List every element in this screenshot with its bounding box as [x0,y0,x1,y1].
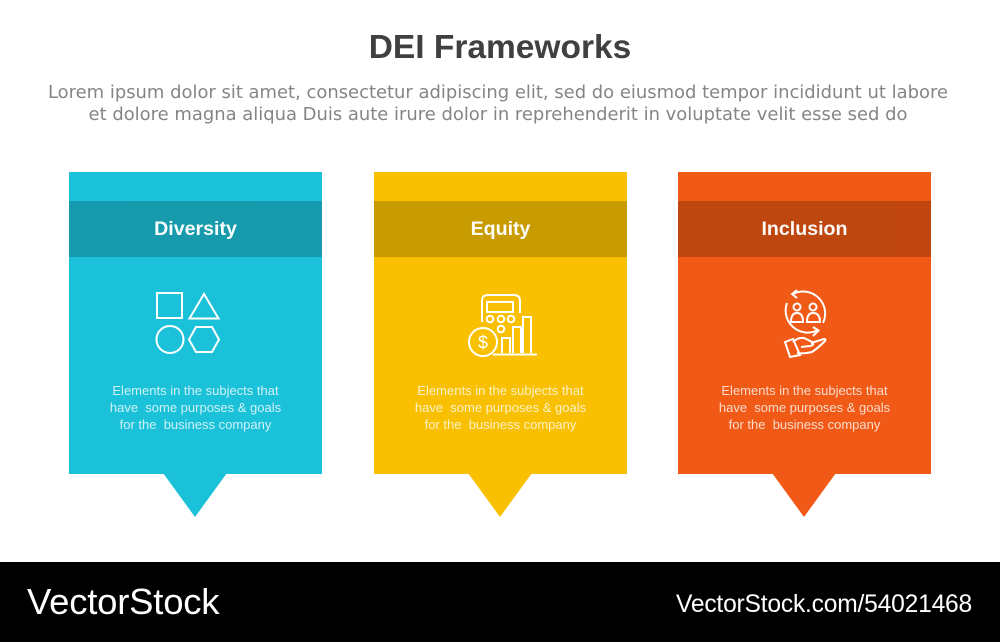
image url text: VectorStock.com/54021468 [676,591,972,618]
panel: diversity [69,172,322,517]
description: equity: have some purposes & goals [415,400,586,414]
description: inclusion: for the business company [729,416,880,432]
icon: calculator and coins: $ [478,332,488,352]
icon: calculator and coins [468,294,537,357]
description: inclusion [719,382,890,432]
heading: inclusion [678,201,931,257]
panel: inclusion [678,172,931,517]
heading: equity: Equity [471,218,530,240]
description: diversity: have some purposes & goals [110,400,281,414]
footer bar [0,562,1000,642]
description: equity [415,382,586,432]
pointer: inclusion [772,473,836,517]
panel: equity [374,172,627,517]
heading: diversity [69,201,322,257]
description: diversity: for the business company [120,416,271,432]
heading: diversity: Diversity [154,218,237,240]
pointer: diversity [163,473,227,517]
pointer: equity [468,473,532,517]
title: DEI Frameworks [369,29,631,66]
subtitle text: Lorem ipsum dolor sit amet, consectetur adipiscing elit, sed do eiusmod tempor incididunt ut labore [48,82,948,102]
description: equity: Elements in the subjects that [417,382,584,398]
description: inclusion: have some purposes & goals [719,400,890,414]
brand logo text: VectorStock [27,581,219,622]
icon: shapes [156,292,220,354]
description: inclusion: Elements in the subjects that [721,382,888,398]
subtitle text: et dolore magna aliqua Duis aute irure dolor in reprehenderit in voluptate velit esse sed do [89,104,907,124]
description: diversity [110,382,281,432]
description: equity: for the business company [425,416,576,432]
heading: inclusion: Inclusion [761,218,848,240]
icon: people cycle in hand [784,289,826,358]
heading: equity [374,201,627,257]
subtitle text [48,82,948,124]
description: diversity: Elements in the subjects that [112,382,279,398]
